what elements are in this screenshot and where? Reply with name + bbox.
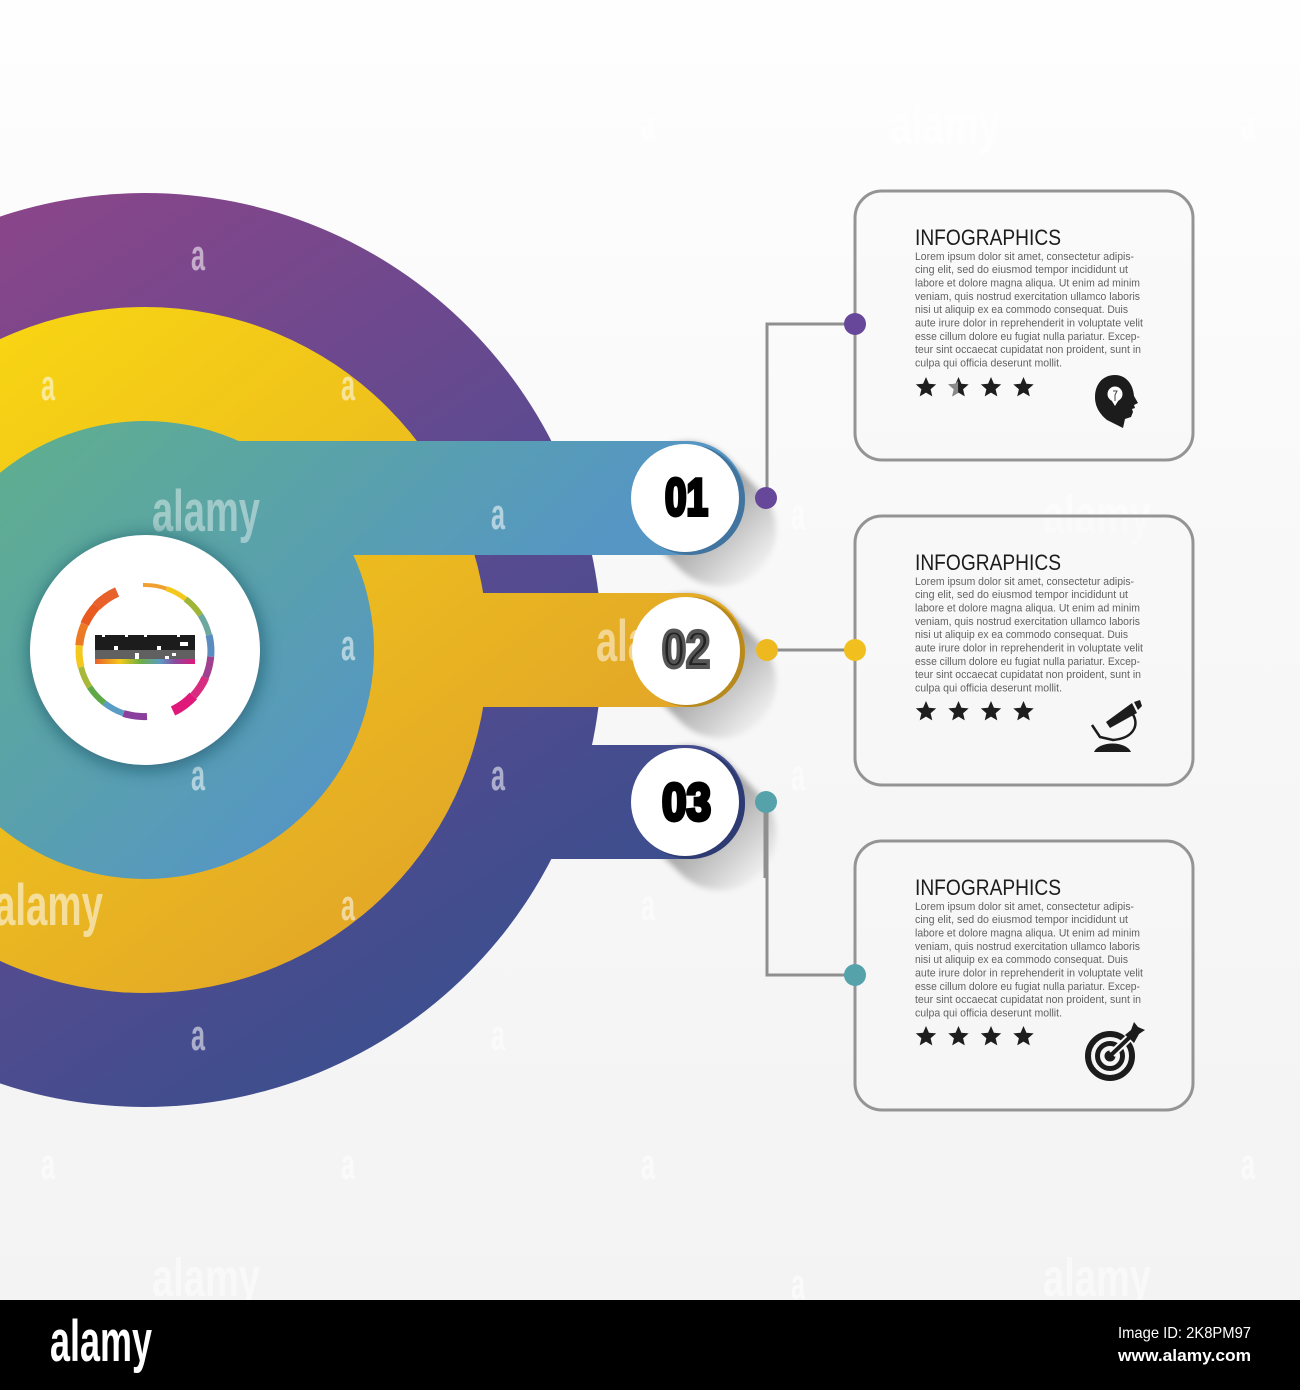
ring watermarks: a [341, 361, 355, 410]
background watermarks: a [641, 1140, 655, 1189]
ring watermarks: a [491, 490, 505, 539]
card 2 body text [915, 576, 1143, 694]
background watermarks: a [341, 1140, 355, 1189]
card 1 body text: aute irure dolor in reprehenderit in voluptate velit [915, 318, 1143, 330]
card 3 body text: culpa qui officia deserunt mollit. [915, 1008, 1062, 1020]
ring watermarks: a [491, 1011, 505, 1060]
number badge 03 [631, 748, 745, 859]
background watermarks: a [791, 751, 805, 800]
card 2 body text: aute irure dolor in reprehenderit in voluptate velit [915, 642, 1143, 654]
card 1 body text: teur sint occaecat cupidatat non proident, sunt in [915, 344, 1141, 356]
number badge 03: 03 [662, 774, 711, 832]
bar 1 blue [232, 441, 745, 555]
card 2 body text: veniam, quis nostrud exercitation ullamco laboris [915, 616, 1140, 628]
card 2 body text: teur sint occaecat cupidatat non proident, sunt in [915, 669, 1141, 681]
bar 2 yellow [460, 593, 745, 707]
card 2 body text: Lorem ipsum dolor sit amet, consectetur adipis- [915, 576, 1134, 588]
ring watermarks: a [191, 751, 205, 800]
connector dots [755, 313, 866, 986]
background watermarks: alamy [1043, 1248, 1151, 1308]
card 3 body text: labore et dolore magna aliqua. Ut enim ad minim [915, 928, 1140, 940]
card 3 [855, 841, 1193, 1110]
card 3 body text: nisi ut aliquip ex ea commodo consequat. Duis [915, 954, 1128, 966]
card 1 stars [916, 377, 1034, 396]
card 1 body text: nisi ut aliquip ex ea commodo consequat. Duis [915, 304, 1128, 316]
connector 3 [766, 802, 855, 975]
card 2 [855, 516, 1193, 785]
card 2 body text: esse cillum dolore eu fugiat nulla pariatur. Excep- [915, 656, 1140, 668]
footer bar [0, 1300, 1300, 1390]
card 2 heading: INFOGRAPHICS [915, 550, 1061, 575]
middle yellow ring [0, 307, 488, 993]
ring watermarks: alamy [596, 609, 704, 674]
card 3 stars [916, 1026, 1034, 1045]
number badge 01: 01 [665, 469, 708, 527]
background watermarks: a [41, 1140, 55, 1189]
center badge [30, 535, 260, 765]
card 2 body text: culpa qui officia deserunt mollit. [915, 682, 1062, 694]
outer purple ring [0, 193, 602, 1107]
card 3 body text: Lorem ipsum dolor sit amet, consectetur adipis- [915, 901, 1134, 913]
card 1 body text: cing elit, sed do eiusmod tempor incididunt ut [915, 264, 1128, 276]
ring watermarks: a [41, 361, 55, 410]
background watermarks: a [641, 100, 655, 149]
inner teal circle [0, 421, 374, 879]
ring watermarks: a [491, 751, 505, 800]
card 3 body text: aute irure dolor in reprehenderit in voluptate velit [915, 968, 1143, 980]
card 1 body text [915, 251, 1143, 370]
card 1 body text: veniam, quis nostrud exercitation ullamco laboris [915, 291, 1140, 303]
center title block [95, 635, 195, 664]
rainbow ring [79, 585, 211, 717]
number badge 01 [631, 444, 745, 555]
card 2 body text: labore et dolore magna aliqua. Ut enim ad minim [915, 602, 1140, 614]
card 3 body text: cing elit, sed do eiusmod tempor incididunt ut [915, 914, 1128, 926]
card 1 heading: INFOGRAPHICS [915, 225, 1061, 250]
icon: head with light bulb [1095, 375, 1138, 428]
background watermarks: a [791, 490, 805, 539]
bar 3 navy [540, 745, 745, 859]
card 1 body text: Lorem ipsum dolor sit amet, consectetur adipis- [915, 251, 1134, 263]
connector 2 [767, 648, 855, 652]
center badge shadow [29, 536, 263, 770]
connector 1 [767, 324, 855, 498]
background watermarks: a [791, 1260, 805, 1309]
card 1 body text: culpa qui officia deserunt mollit. [915, 358, 1062, 370]
ring watermarks: a [341, 621, 355, 670]
card 3 body text: veniam, quis nostrud exercitation ullamco laboris [915, 941, 1140, 953]
card 2 stars [916, 701, 1034, 720]
background watermarks: alamy [890, 95, 1000, 155]
card 1 body text: labore et dolore magna aliqua. Ut enim ad minim [915, 278, 1140, 290]
card 1 body text: esse cillum dolore eu fugiat nulla pariatur. Excep- [915, 331, 1140, 343]
ring watermarks: a [191, 231, 205, 280]
card 3 body text: esse cillum dolore eu fugiat nulla pariatur. Excep- [915, 981, 1140, 993]
ring watermarks: a [341, 881, 355, 930]
ring watermarks: alamy [152, 479, 260, 544]
background watermarks: alamy [1043, 485, 1151, 545]
long shadow: bar 2 [688, 650, 720, 682]
card 3 body text: teur sint occaecat cupidatat non proident, sunt in [915, 994, 1141, 1006]
card 2 body text: cing elit, sed do eiusmod tempor incididunt ut [915, 589, 1128, 601]
icon: microscope [1092, 700, 1142, 752]
card 1 [855, 191, 1193, 460]
long shadow: bar 3 [688, 802, 720, 834]
background watermarks: a [641, 881, 655, 930]
icon: target with arrow [1088, 1022, 1145, 1078]
number badge 02 [632, 597, 745, 707]
card 3 heading: INFOGRAPHICS [915, 875, 1061, 900]
number badge 02: 02 [662, 621, 710, 679]
footer logo: alamy [50, 1309, 152, 1374]
card 2 body text: nisi ut aliquip ex ea commodo consequat. Duis [915, 629, 1128, 641]
background watermarks: a [1241, 100, 1255, 149]
footer image id: Image ID: 2K8PM97 [1118, 1325, 1251, 1342]
ring watermarks: a [191, 1011, 205, 1060]
ring watermarks [0, 231, 704, 1060]
footer url: www.alamy.com [1117, 1346, 1251, 1365]
background watermarks: a [1241, 1140, 1255, 1189]
background watermarks: alamy [152, 1248, 260, 1308]
long shadow: bar 1 [688, 498, 720, 530]
card 3 body text [915, 901, 1143, 1020]
